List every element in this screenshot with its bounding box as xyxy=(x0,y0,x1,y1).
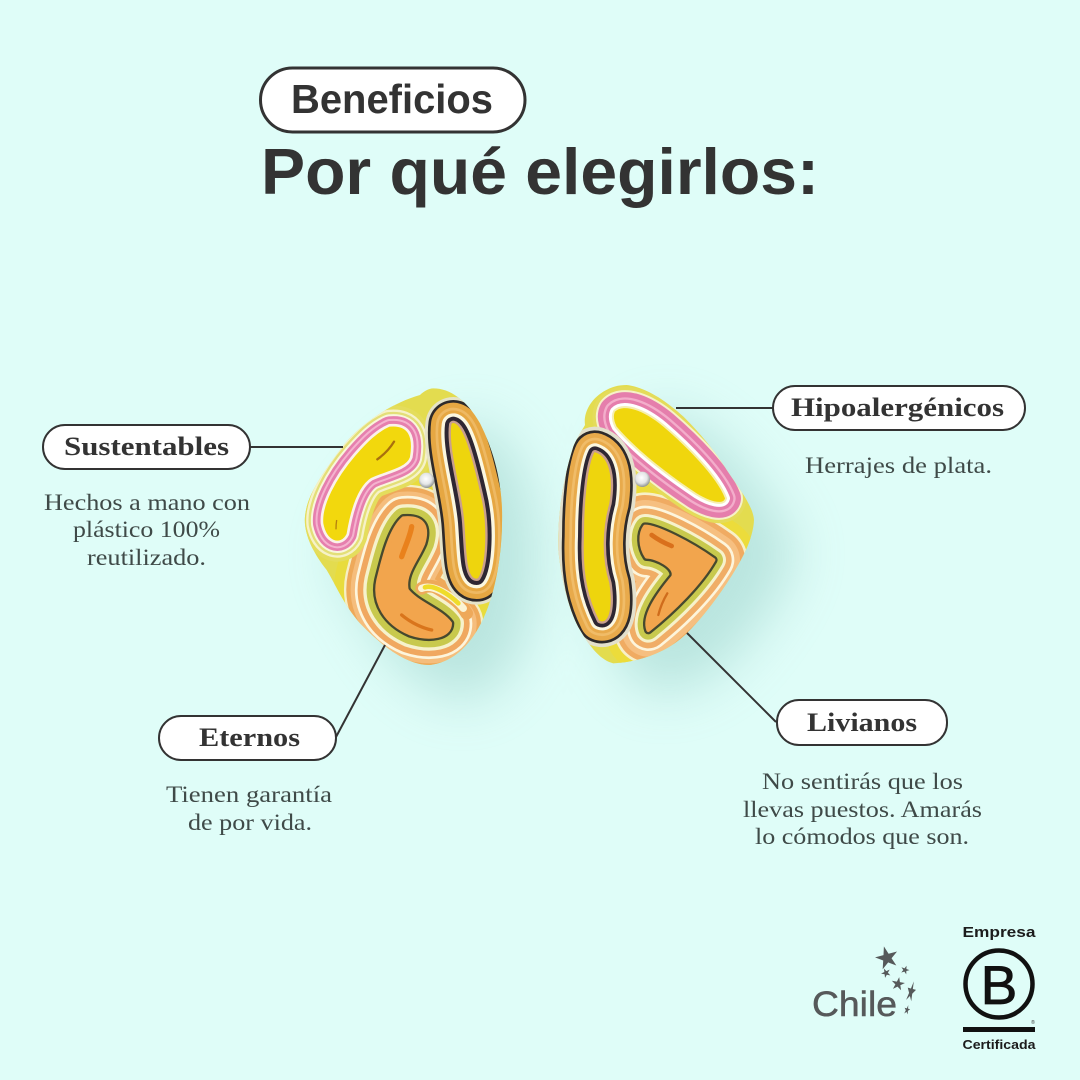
logo: Marca Chile xyxy=(812,943,918,1024)
connector: Livianos xyxy=(687,633,776,722)
lobe: pink swirl xyxy=(325,428,409,539)
clasp pearl xyxy=(635,472,650,487)
earring shadows xyxy=(340,415,794,700)
text: Eternos description: de por vida. xyxy=(188,810,312,836)
label: Livianos xyxy=(777,700,947,745)
connector: Eternos xyxy=(336,645,385,737)
label: Hipoalergénicos xyxy=(773,386,1025,430)
right earring xyxy=(558,385,754,663)
lobe: orange swirl xyxy=(641,527,713,630)
text: Livianos description: lo cómodos que son. xyxy=(755,824,969,850)
text: Hipoalergénicos description: Herrajes de plata. xyxy=(805,453,992,479)
lobe: orange swirl xyxy=(377,518,467,637)
logo: Empresa B Certificada xyxy=(962,924,1037,1052)
clasp pearl xyxy=(419,473,434,488)
text: Sustentables description: plástico 100% xyxy=(73,517,220,543)
connector: Hipoalergénicos xyxy=(676,407,773,409)
left earring xyxy=(305,388,502,665)
label: Eternos xyxy=(159,716,336,760)
logo: Empresa B Certificada: Empresa xyxy=(962,924,1036,941)
label: Sustentables xyxy=(43,425,250,469)
label: Livianos: Livianos xyxy=(807,708,917,737)
connector: Sustentables xyxy=(250,446,343,448)
title: Por qué elegirlos: xyxy=(261,135,819,208)
badge: Beneficios xyxy=(260,68,525,132)
lobe: pink swirl xyxy=(614,408,725,502)
lobe: black and orange swirl xyxy=(453,425,483,577)
lobe: black and orange swirl xyxy=(585,453,610,620)
logo: Empresa B Certificada: ® xyxy=(1031,1019,1035,1026)
text: Sustentables description: Hechos a mano con xyxy=(44,490,250,516)
logo: Empresa B Certificada: B xyxy=(981,954,1017,1016)
text: Eternos description xyxy=(166,782,333,836)
logo: Marca Chile: Chile xyxy=(812,985,897,1024)
label: Eternos: Eternos xyxy=(199,723,300,752)
text: Livianos description: No sentirás que los xyxy=(762,769,963,795)
text: Sustentables description: reutilizado. xyxy=(87,545,206,571)
text: Sustentables description xyxy=(44,490,250,571)
badge: Beneficios: Beneficios xyxy=(291,76,493,122)
text: Livianos description xyxy=(743,769,982,850)
logo: Empresa B Certificada: Certificada xyxy=(962,1038,1037,1052)
label: Sustentables: Sustentables xyxy=(64,432,229,461)
text: Livianos description: llevas puestos. Amarás xyxy=(743,797,982,823)
label: Hipoalergénicos: Hipoalergénicos xyxy=(791,393,1004,422)
text: Eternos description: Tienen garantía xyxy=(166,782,333,808)
